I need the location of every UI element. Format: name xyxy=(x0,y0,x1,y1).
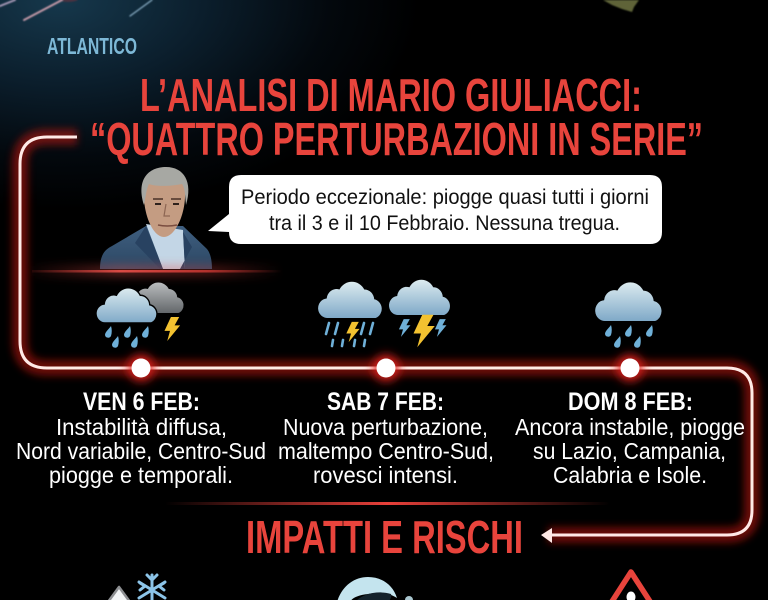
day: Venerdi 6 febbraio: VEN 6 FEB: xyxy=(83,388,200,416)
day: Sabato 7 febbraio: Nuova perturbazione, xyxy=(283,414,488,440)
icon: heavy rain cloud with lightning xyxy=(318,282,382,346)
icon: rain cloud with grey storm cloud xyxy=(96,283,184,348)
divider xyxy=(165,502,610,505)
day: Domenica 8 febbraio: su Lazio, Campania, xyxy=(533,438,726,464)
speech bubble: Periodo eccezionale: piogge quasi tutti i giorni xyxy=(241,185,649,209)
map fragment top right xyxy=(590,0,639,12)
day: Venerdi 6 febbraio: Instabilità diffusa, xyxy=(56,414,227,440)
icon: snowy mountain with snowflake xyxy=(108,575,165,600)
day: Venerdi 6 febbraio xyxy=(16,388,266,488)
day: Domenica 8 febbraio: Ancora instabile, piogge xyxy=(515,414,745,440)
day: Domenica 8 febbraio xyxy=(515,388,745,488)
heading: impatti e rischi: IMPATTI E RISCHI xyxy=(246,511,523,563)
day: Domenica 8 febbraio: Calabria e Isole. xyxy=(553,462,707,488)
day: Sabato 7 febbraio: rovesci intensi. xyxy=(313,462,458,488)
icon: warning triangle xyxy=(611,572,651,600)
day: Venerdi 6 febbraio: piogge e temporali. xyxy=(49,462,233,488)
icon: rain cloud xyxy=(595,282,662,348)
portrait: Mario Giuliacci xyxy=(100,167,212,269)
day: Venerdi 6 febbraio: Nord variabile, Centro-Sud xyxy=(16,438,266,464)
timeline dots xyxy=(128,355,643,381)
icon: storm cloud with three bolts xyxy=(389,280,450,347)
title xyxy=(90,69,703,165)
label: Atlantico: ATLANTICO xyxy=(47,33,137,59)
decorative streaks top left xyxy=(0,0,152,20)
speech bubble xyxy=(208,175,662,244)
day: Sabato 7 febbraio: maltempo Centro-Sud, xyxy=(278,438,494,464)
day: Sabato 7 febbraio: SAB 7 FEB: xyxy=(327,388,444,416)
icon: flood wave xyxy=(337,577,413,600)
day: Domenica 8 febbraio: DOM 8 FEB: xyxy=(568,388,693,416)
speech bubble: tra il 3 e il 10 Febbraio. Nessuna tregua. xyxy=(269,211,620,235)
day: Sabato 7 febbraio xyxy=(278,388,494,488)
portrait rule xyxy=(32,266,282,276)
timeline connector xyxy=(20,137,752,543)
